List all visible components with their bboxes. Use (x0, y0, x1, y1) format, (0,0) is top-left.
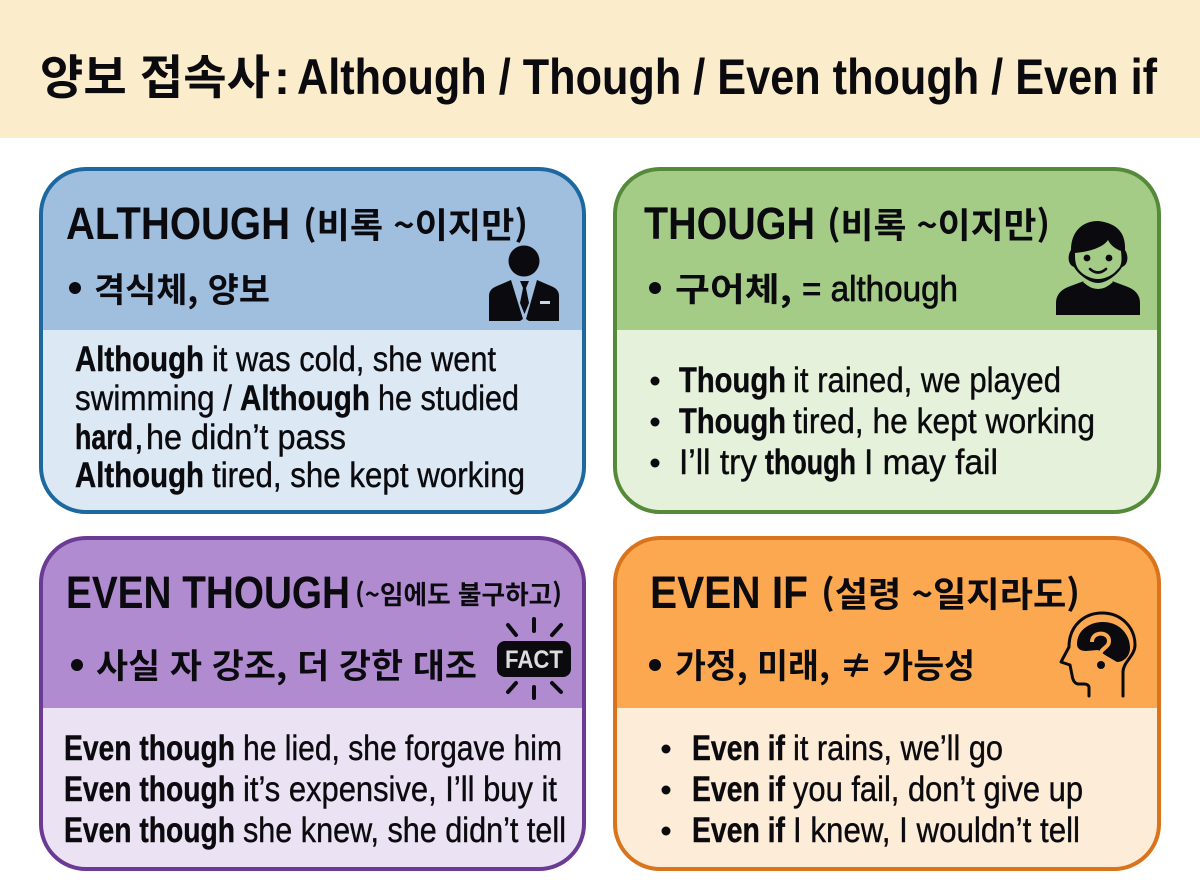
heading: even though (66, 567, 562, 618)
title: 양보 접속사 (40, 39, 270, 108)
examples: although: Although (240, 379, 370, 418)
examples: though: I’ll try (679, 443, 757, 482)
examples: although: Although (75, 456, 204, 495)
icon: head with question mark (1061, 613, 1135, 696)
title (40, 39, 1157, 108)
examples: even if: it rains, we’ll go (793, 729, 1003, 768)
icon: fact badge: FACT (505, 646, 563, 674)
icon: businessman (489, 246, 559, 321)
heading: though: (비록 ~이지만) (827, 198, 1050, 249)
examples: though: Though (679, 402, 786, 441)
examples: even though (64, 729, 566, 850)
examples: even though: it’s expensive, I’ll buy it (243, 770, 557, 809)
examples: although: , (134, 418, 144, 457)
examples: even though: Even though (64, 729, 235, 768)
examples: even if: you fail, don’t give up (793, 770, 1083, 809)
panel: although (41, 169, 584, 512)
heading: although: ALTHOUGH (66, 198, 290, 249)
examples: although: it was cold, she went (212, 340, 496, 379)
heading: though (644, 198, 1050, 249)
usage note: though (649, 263, 958, 311)
examples: even if: I knew, I wouldn’t tell (793, 811, 1080, 850)
examples: even if: Even if (692, 729, 785, 768)
heading: although: (비록 ~이지만) (303, 198, 528, 249)
examples: although: he didn’t pass (146, 418, 346, 457)
examples: though (650, 361, 1095, 482)
title: : (274, 52, 290, 105)
examples: though: it rained, we played (793, 361, 1061, 400)
heading: even if (650, 567, 1080, 618)
usage note: although: 격식체, 양보 (94, 263, 270, 312)
examples: though: I may fail (864, 443, 998, 482)
examples: although: tired, she kept working (212, 456, 525, 495)
examples: although (75, 340, 525, 495)
examples: even though: she knew, she didn’t tell (243, 811, 566, 850)
examples: even though: Even though (64, 811, 235, 850)
examples: although: he studied (378, 379, 519, 418)
heading: although (66, 198, 528, 249)
panel: even if (615, 538, 1159, 869)
examples: although: Although (75, 340, 204, 379)
usage note: though: 구어체, (675, 263, 792, 311)
heading: though: THOUGH (644, 198, 815, 249)
examples: even if: Even if (692, 770, 785, 809)
usage note: though: = although (802, 268, 958, 309)
icon: friendly person (1056, 221, 1140, 315)
examples: though: though (765, 443, 856, 482)
heading: even if: EVEN IF (650, 567, 808, 618)
examples: even though: he lied, she forgave him (243, 729, 562, 768)
examples: even though: Even though (64, 770, 235, 809)
heading: even though: EVEN THOUGH (66, 567, 350, 618)
examples: even if: Even if (692, 811, 785, 850)
icon: fact badge (497, 619, 571, 698)
usage note: even though: 사실 자 강조, 더 강한 대조 (96, 639, 477, 688)
heading: even if: (설령 ~일지라도) (821, 567, 1080, 618)
usage note: even if: 가정, 미래, ≠ 가능성 (675, 639, 975, 688)
panel: though (615, 169, 1159, 512)
header band (0, 0, 1200, 138)
heading: even though: (~임에도 불구하고) (355, 575, 562, 612)
panel: even though (41, 538, 584, 869)
examples: though: Though (679, 361, 786, 400)
examples: although: hard (75, 418, 133, 457)
examples: even if (662, 729, 1083, 850)
examples: though: tired, he kept working (793, 402, 1095, 441)
examples: although: swimming / (75, 379, 232, 418)
